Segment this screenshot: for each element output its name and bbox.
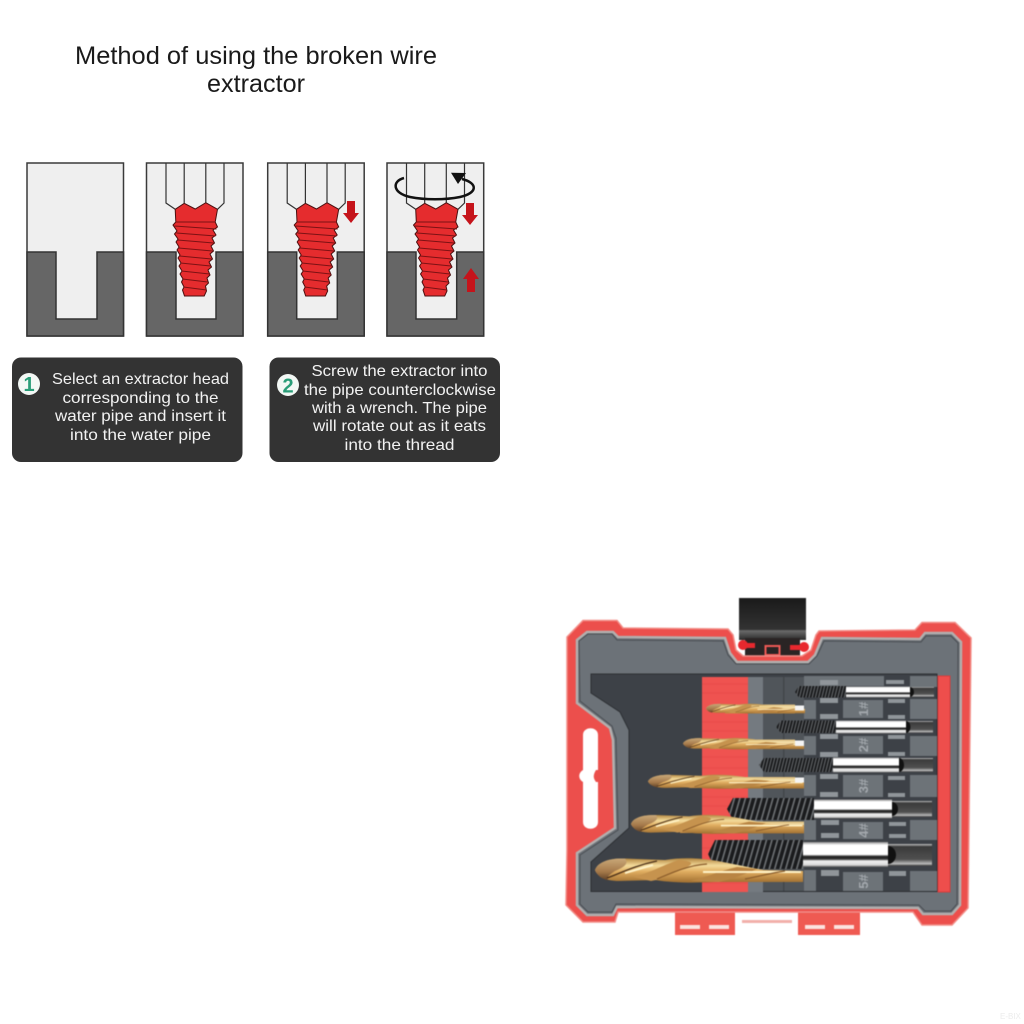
icon: number 1	[18, 373, 40, 396]
product: extractor and drill case: 4#	[856, 823, 871, 838]
step 1 text	[52, 371, 229, 444]
callout: step 2	[270, 358, 500, 462]
red outer shell	[566, 620, 971, 925]
grey inner frame	[577, 632, 961, 915]
arrow: down	[462, 203, 478, 225]
tray columns	[763, 676, 937, 891]
panel: extractor pressed down	[268, 163, 364, 336]
drill bit 5	[595, 858, 803, 883]
arrow: down	[343, 201, 359, 223]
step 2 text: into the thread	[344, 437, 454, 454]
product: extractor and drill case: 5#	[856, 874, 871, 889]
step 1 text: Select an extractor head	[52, 371, 229, 388]
icon: number 2	[277, 374, 299, 398]
panel: extractor inserted	[146, 163, 243, 336]
arrow: up	[463, 268, 479, 292]
step 2 text	[304, 363, 496, 454]
product: extractor and drill case: 1#	[856, 701, 871, 716]
panel: empty pipe	[27, 163, 124, 336]
icon: number 1: 1	[23, 374, 35, 396]
icon: number 2: 2	[282, 376, 294, 398]
title: extractor	[207, 70, 305, 98]
red strip	[702, 677, 748, 892]
size labels	[843, 700, 883, 891]
step 1 text: into the water pipe	[70, 427, 211, 444]
callout: step 1	[12, 358, 242, 462]
drill bit 1	[706, 704, 805, 714]
step 2 text: will rotate out as it eats	[312, 418, 486, 435]
product: extractor and drill case: 3#	[856, 778, 871, 793]
black clip	[738, 598, 809, 656]
watermark: E-BIX	[1000, 1012, 1022, 1021]
title: Method of using the broken wire	[75, 42, 437, 70]
panel: extractor rotated	[387, 163, 484, 336]
extractor 4	[727, 798, 932, 820]
step 2 text: with a wrench. The pipe	[311, 400, 487, 417]
right red strip	[938, 676, 950, 892]
title	[75, 42, 437, 98]
product: extractor and drill case	[566, 598, 971, 935]
grey strip	[748, 677, 763, 892]
step 2 text: the pipe counterclockwise	[304, 382, 496, 399]
step 2 text: Screw the extractor into	[312, 363, 488, 380]
extractor 1	[795, 686, 934, 698]
extractor 2	[776, 720, 933, 734]
extractor 5	[708, 840, 932, 869]
bottom hinge tabs	[675, 910, 860, 935]
extractor 3	[759, 758, 933, 772]
step 1 text: corresponding to the	[62, 390, 219, 407]
drill bit 2	[683, 738, 804, 749]
drill bit 3	[648, 775, 804, 789]
frame inner dark line	[579, 634, 958, 912]
step 1 text: water pipe and insert it	[54, 408, 227, 425]
dark tray well	[591, 674, 937, 892]
product: extractor and drill case: 2#	[856, 737, 871, 752]
drill bit 4	[631, 815, 804, 834]
white hanging slot	[579, 728, 598, 829]
arrow: rotation	[396, 173, 474, 199]
